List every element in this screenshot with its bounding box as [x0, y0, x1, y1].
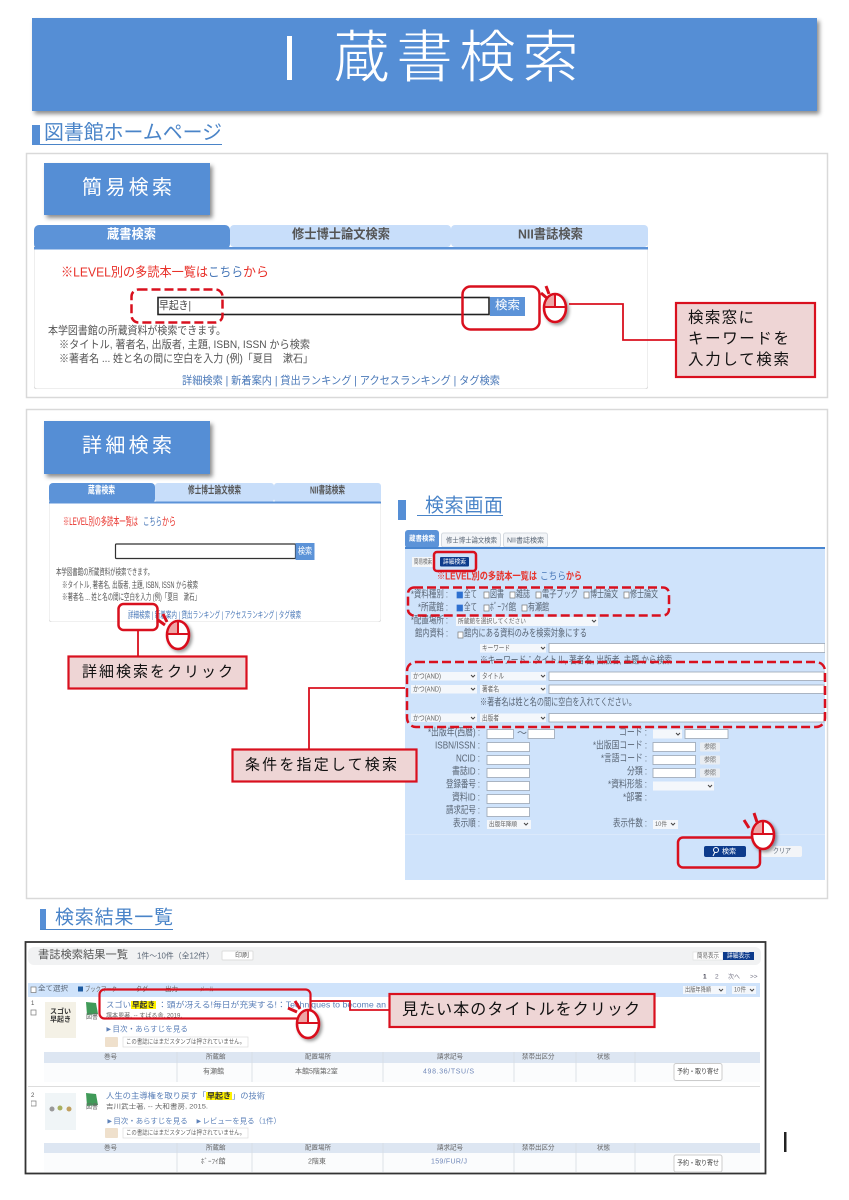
small search page screenshot: ※タイトル, 著者名, 出版者, 主題, ISBN, ISSN から検索 [62, 579, 198, 590]
holdings table 2: 禁帯出区分 [522, 1142, 555, 1152]
connector [569, 304, 676, 340]
advanced search form screenshot: 参照 [704, 742, 716, 750]
holdings table 2: ﾎﾞｰﾌｲ館 [201, 1156, 226, 1166]
holdings table 2: 状態 [597, 1142, 610, 1152]
result item 1: 塚本恩著, -- すばる舎, 2019. [106, 1010, 182, 1020]
result item 2: 」の技術 [232, 1090, 265, 1100]
pagination [703, 972, 758, 980]
holdings table 2: 巻号 [104, 1142, 118, 1152]
highlight: material type options [408, 588, 669, 616]
title banner [32, 18, 817, 111]
advanced search form screenshot: 有瀬館 [528, 600, 549, 614]
holdings table 2 [44, 1142, 760, 1172]
panel: results list screenshot [26, 942, 766, 1174]
icon: mouse click [158, 614, 189, 649]
highlight: advanced tab [434, 552, 476, 571]
small search page screenshot: 本学図書館の所蔵資料が検索できます。 [56, 566, 153, 577]
holdings table 1 [44, 1052, 760, 1082]
advanced search form screenshot: 表示順 : [453, 818, 480, 830]
advanced search form screenshot: 資料ID : [452, 790, 480, 804]
results title bar [28, 947, 761, 965]
advanced search form screenshot: クリア [773, 847, 791, 855]
toolbar: メール [200, 986, 214, 993]
callout: click book title: 見たい本のタイトルをクリック [402, 1000, 640, 1018]
heading: advanced search: 詳細検索 [82, 434, 172, 457]
holdings table 2: 2階東 [308, 1156, 326, 1166]
toolbar: 全て選択 [38, 984, 68, 992]
results title bar: 詳細表示 [727, 950, 750, 960]
result item 1: この書誌にはまだスタンプは押されていません。 [126, 1036, 245, 1046]
small search page screenshot: 修士博士論文検索 [188, 484, 241, 496]
advanced search form screenshot: 図書 [490, 588, 504, 600]
holdings table 1: 巻号 [104, 1052, 118, 1060]
highlight: book title [100, 990, 310, 1018]
advanced search form screenshot: 雑誌 [516, 588, 530, 600]
connector [309, 688, 405, 749]
search page screenshot: 蔵書検索 [107, 226, 156, 242]
holdings table 1: 請求記号 [437, 1052, 464, 1060]
section heading: search results: 検索結果一覧 [55, 906, 173, 928]
result item 2: 吉川武士著, -- 大和書房, 2015. [106, 1102, 208, 1110]
advanced search form screenshot: 全て [464, 588, 477, 600]
advanced search form screenshot: から [566, 570, 582, 582]
advanced search form screenshot: 10件 [655, 819, 667, 828]
advanced search form screenshot: タイトル [482, 672, 504, 680]
panel: advanced search [26, 410, 828, 898]
heading: advanced search [44, 421, 210, 474]
search page screenshot: から [243, 264, 269, 280]
advanced search form screenshot: ～ [517, 728, 527, 740]
callout: click advanced search [68, 656, 246, 688]
callout: click advanced search: 詳細検索をクリック [82, 664, 233, 680]
search page screenshot: 検索 [495, 298, 520, 312]
connector [311, 1001, 389, 1010]
advanced search form screenshot: 修士論文 [630, 588, 658, 600]
small search page screenshot: こちら [143, 515, 162, 528]
small search page screenshot: 蔵書検索 [88, 484, 115, 496]
advanced search form screenshot: 書誌ID : [452, 764, 480, 778]
heading: simple search: 簡易検索 [82, 176, 172, 199]
advanced search form screenshot: *配置場所 : [411, 614, 448, 626]
heading: simple search [44, 163, 210, 215]
icon: green book [86, 1002, 98, 1015]
small search page screenshot: NII書誌検索 [310, 484, 345, 496]
advanced search form screenshot: NII書誌検索 [507, 536, 544, 544]
advanced search form screenshot: 請求記号 : [446, 804, 480, 816]
highlight: search button [462, 286, 540, 330]
search page screenshot: NII書誌検索 [518, 226, 583, 242]
advanced search form screenshot: ISBN/ISSN : [435, 740, 480, 752]
advanced search form screenshot: コード : [619, 728, 647, 738]
pagination: >> [750, 974, 758, 980]
advanced search form screenshot: 館内資料 : [415, 626, 448, 640]
result item 2: ►目次・あらすじを見る ►レビューを見る（1件） [106, 1116, 281, 1126]
advanced search form screenshot: 参照 [704, 754, 716, 764]
callout: specify conditions: 条件を指定して検索 [245, 756, 397, 774]
advanced search form screenshot: ※著者名は姓と名の間に空白を入れてください。 [480, 696, 636, 708]
advanced search form screenshot: 著者名 [482, 684, 499, 694]
holdings table 2: 予約・取り寄せ [677, 1158, 719, 1167]
holdings table 1: 予約・取り寄せ [677, 1066, 719, 1076]
result item 2: この書誌にはまだスタンプは押されていません。 [126, 1128, 245, 1136]
advanced search form screenshot [405, 530, 825, 880]
results title bar: 印刷 [235, 950, 249, 959]
advanced search form screenshot: 参照 [704, 768, 716, 776]
search page screenshot: 修士博士論文検索 [292, 226, 390, 242]
callout: click book title [390, 994, 654, 1027]
search page screenshot: 詳細検索 | 新着案内 | 貸出ランキング | アクセスランキング | タグ検索 [182, 373, 500, 387]
advanced search form screenshot: かつ(AND) [413, 672, 441, 680]
advanced search form screenshot: かつ(AND) [413, 684, 441, 694]
small search page screenshot: 詳細検索 | 新着案内 | 貸出ランキング | アクセスランキング | タグ検索 [128, 609, 301, 620]
search page screenshot: 早起き| [159, 299, 191, 312]
highlight: keyword box [132, 290, 222, 322]
advanced search form screenshot: 検索 [722, 846, 736, 856]
holdings table 1: 498.36/TSU/S [423, 1068, 474, 1076]
result item 2: 2 [31, 1093, 35, 1099]
advanced search form screenshot: 出版者 [482, 712, 499, 722]
result item 2 [31, 1090, 760, 1172]
advanced search form screenshot: 詳細検索 [443, 556, 466, 566]
advanced search form screenshot: 蔵書検索 [409, 534, 435, 542]
advanced search form screenshot: ※キーワード：タイトル, 著者名, 出版者, 主題 から検索 [480, 654, 672, 666]
search page screenshot: 本学図書館の所蔵資料が検索できます。 [48, 323, 226, 337]
advanced search form screenshot: 所蔵館を選択してください [458, 616, 526, 625]
small search page screenshot: から [162, 515, 176, 528]
icon: green book [86, 1093, 98, 1106]
advanced search form screenshot: 出版年降順 [489, 819, 517, 828]
results title bar: 書誌検索結果一覧 [38, 947, 128, 961]
holdings table 1: 所蔵館 [206, 1052, 226, 1060]
result item 1: ：頭が冴える!毎日が充実する!：Techniques to become an [158, 1000, 386, 1010]
advanced search form screenshot: キーワード [482, 644, 510, 652]
results title bar: 簡易表示 [697, 950, 719, 960]
result item 2: 早起き [207, 1090, 231, 1100]
holdings table 1: 有瀬館 [203, 1066, 224, 1076]
advanced search form screenshot: 登録番号 : [446, 778, 480, 790]
book cover 1 [45, 1002, 76, 1038]
toolbar: 出版年降順 [685, 984, 711, 994]
toolbar: タグ [136, 984, 148, 993]
stray vertical bar [784, 1132, 786, 1152]
icon: mouse click [541, 286, 566, 322]
heading: search screen: 検索画面 [425, 494, 503, 516]
advanced search form screenshot: *所蔵館 : [418, 600, 448, 614]
heading: search screen [398, 494, 503, 520]
small search page screenshot [49, 483, 381, 622]
holdings table 1: 禁帯出区分 [522, 1052, 555, 1060]
search page screenshot [34, 225, 648, 389]
callout: enter keyword: キーワードを [688, 330, 789, 348]
result item 2: 図書 [86, 1102, 98, 1110]
toolbar [28, 983, 760, 997]
result item 1: 1 [31, 1001, 35, 1007]
advanced search form screenshot: 全て [464, 600, 477, 614]
result item 1: ►目次・あらすじを見る [105, 1024, 188, 1034]
callout: enter keyword [676, 303, 815, 377]
highlight: advanced search link [118, 604, 158, 630]
callout: enter keyword: 検索窓に [688, 308, 754, 326]
result item 2: 人生の主導権を取り戻す「 [106, 1090, 206, 1100]
panel: simple search [26, 154, 828, 398]
book cover 2 [45, 1093, 76, 1130]
advanced search form screenshot: 館内にある資料のみを検索対象にする [464, 626, 587, 640]
advanced search form screenshot: *資料形態 : [608, 778, 647, 790]
advanced search form screenshot: かつ(AND) [413, 714, 441, 722]
highlight: search conditions [407, 662, 825, 727]
advanced search form screenshot: *出版年(西暦) : [428, 726, 480, 738]
callout: enter keyword: 入力して検索 [688, 350, 789, 368]
connector [137, 630, 139, 656]
toolbar: 10件 [734, 984, 746, 994]
result item 1: スゴい [106, 1000, 131, 1010]
search page screenshot: ※タイトル, 著者名, 出版者, 主題, ISBN, ISSN から検索 [59, 337, 310, 351]
small search page screenshot: ※LEVEL別の多読本一覧は [63, 514, 138, 528]
pagination: 1 [703, 974, 707, 980]
book cover 1: スゴい [50, 1006, 71, 1016]
pagination: 次へ [728, 972, 740, 980]
result item 1 [28, 1000, 760, 1087]
advanced search form screenshot: こちら [540, 570, 566, 582]
section heading: library homepage: 図書館ホームページ [44, 121, 222, 144]
holdings table 2: 所蔵館 [206, 1142, 226, 1152]
small search page screenshot: 検索 [298, 545, 312, 556]
title banner: 蔵書検索 [333, 26, 579, 90]
holdings table 1: 状態 [597, 1052, 610, 1060]
holdings table 1: 配置場所 [305, 1052, 332, 1060]
advanced search form screenshot: *部署 : [623, 792, 647, 804]
holdings table 2: 請求記号 [437, 1142, 464, 1152]
holdings table 2: 159/FUR/J [431, 1158, 467, 1166]
holdings table 2: 配置場所 [305, 1142, 332, 1152]
advanced search form screenshot: ﾎﾞｰﾌｲ館 [490, 600, 516, 614]
book cover 1: 早起き [50, 1014, 71, 1024]
search page screenshot: こちら [208, 264, 243, 280]
result item 1: 早起き [132, 1000, 155, 1010]
advanced search form screenshot: 博士論文 [590, 588, 618, 600]
advanced search form screenshot: *言語コード : [601, 752, 647, 764]
callout: specify conditions [232, 750, 416, 782]
pagination: 2 [715, 974, 719, 980]
advanced search form screenshot: 修士博士論文検索 [446, 536, 497, 544]
highlight: search button [678, 838, 760, 868]
icon: mouse click [744, 813, 774, 849]
toolbar: ブックマーク [85, 984, 117, 993]
advanced search form screenshot: *出版国コード : [593, 738, 647, 752]
advanced search form screenshot: *資料種別 : [411, 588, 448, 600]
advanced search form screenshot: 電子ブック [542, 588, 578, 600]
advanced search form screenshot: ※LEVEL別の多読本一覧は [437, 570, 537, 582]
advanced search form screenshot: NCID : [456, 754, 480, 764]
search page screenshot: ※著者名 ... 姓と名の間に空白を入力 (例)「夏目 漱石」 [59, 351, 313, 365]
search page screenshot: ※LEVEL別の多読本一覧は [61, 264, 208, 280]
toolbar: 出力 [165, 984, 178, 993]
icon: mouse click [288, 1001, 319, 1038]
holdings table 1: 本館5階第2室 [295, 1066, 338, 1076]
advanced search form screenshot: 簡易検索 [414, 556, 432, 566]
small search page screenshot: ※著者名 ... 姓と名の間に空白を入力 (例)「夏目 漱石」 [62, 591, 200, 602]
advanced search form screenshot: 表示件数 : [613, 816, 647, 830]
advanced search form screenshot: 分類 : [627, 766, 647, 778]
result item 1: 図書 [86, 1012, 98, 1020]
results title bar: 1件～10件（全12件） [137, 950, 214, 960]
